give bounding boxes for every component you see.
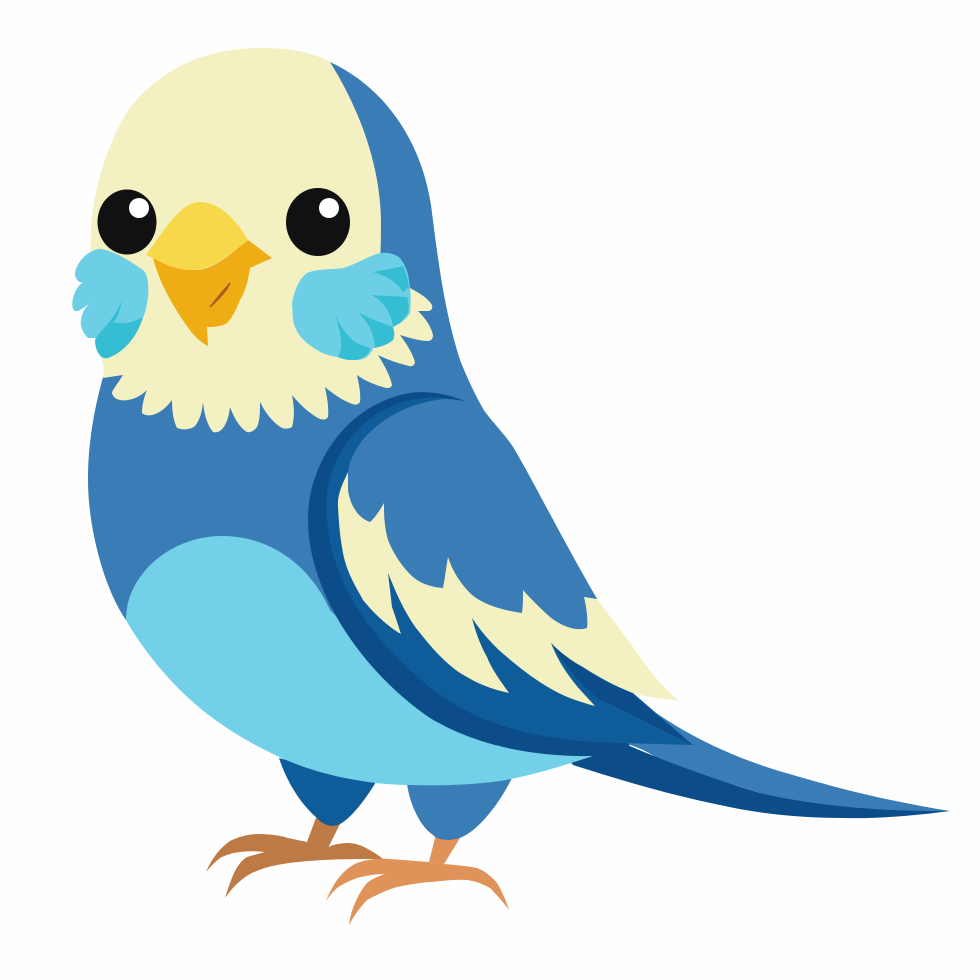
wing outer dark edge (308, 392, 630, 756)
right eye (286, 188, 350, 256)
near leg (279, 758, 376, 848)
left cheek (72, 249, 148, 358)
head and collar (91, 48, 433, 432)
far foot (326, 859, 509, 925)
near foot (206, 834, 383, 898)
wing feather tip (551, 643, 693, 745)
left eye (98, 190, 156, 254)
wing inner band (326, 397, 693, 745)
belly (126, 536, 593, 785)
tail (550, 680, 950, 818)
far leg (404, 778, 512, 864)
right cheek (292, 253, 411, 360)
wing cream feathers (338, 472, 678, 706)
body (88, 62, 597, 740)
beak (146, 202, 272, 346)
wing mid-blue coverts (348, 399, 597, 629)
wing (308, 392, 693, 756)
